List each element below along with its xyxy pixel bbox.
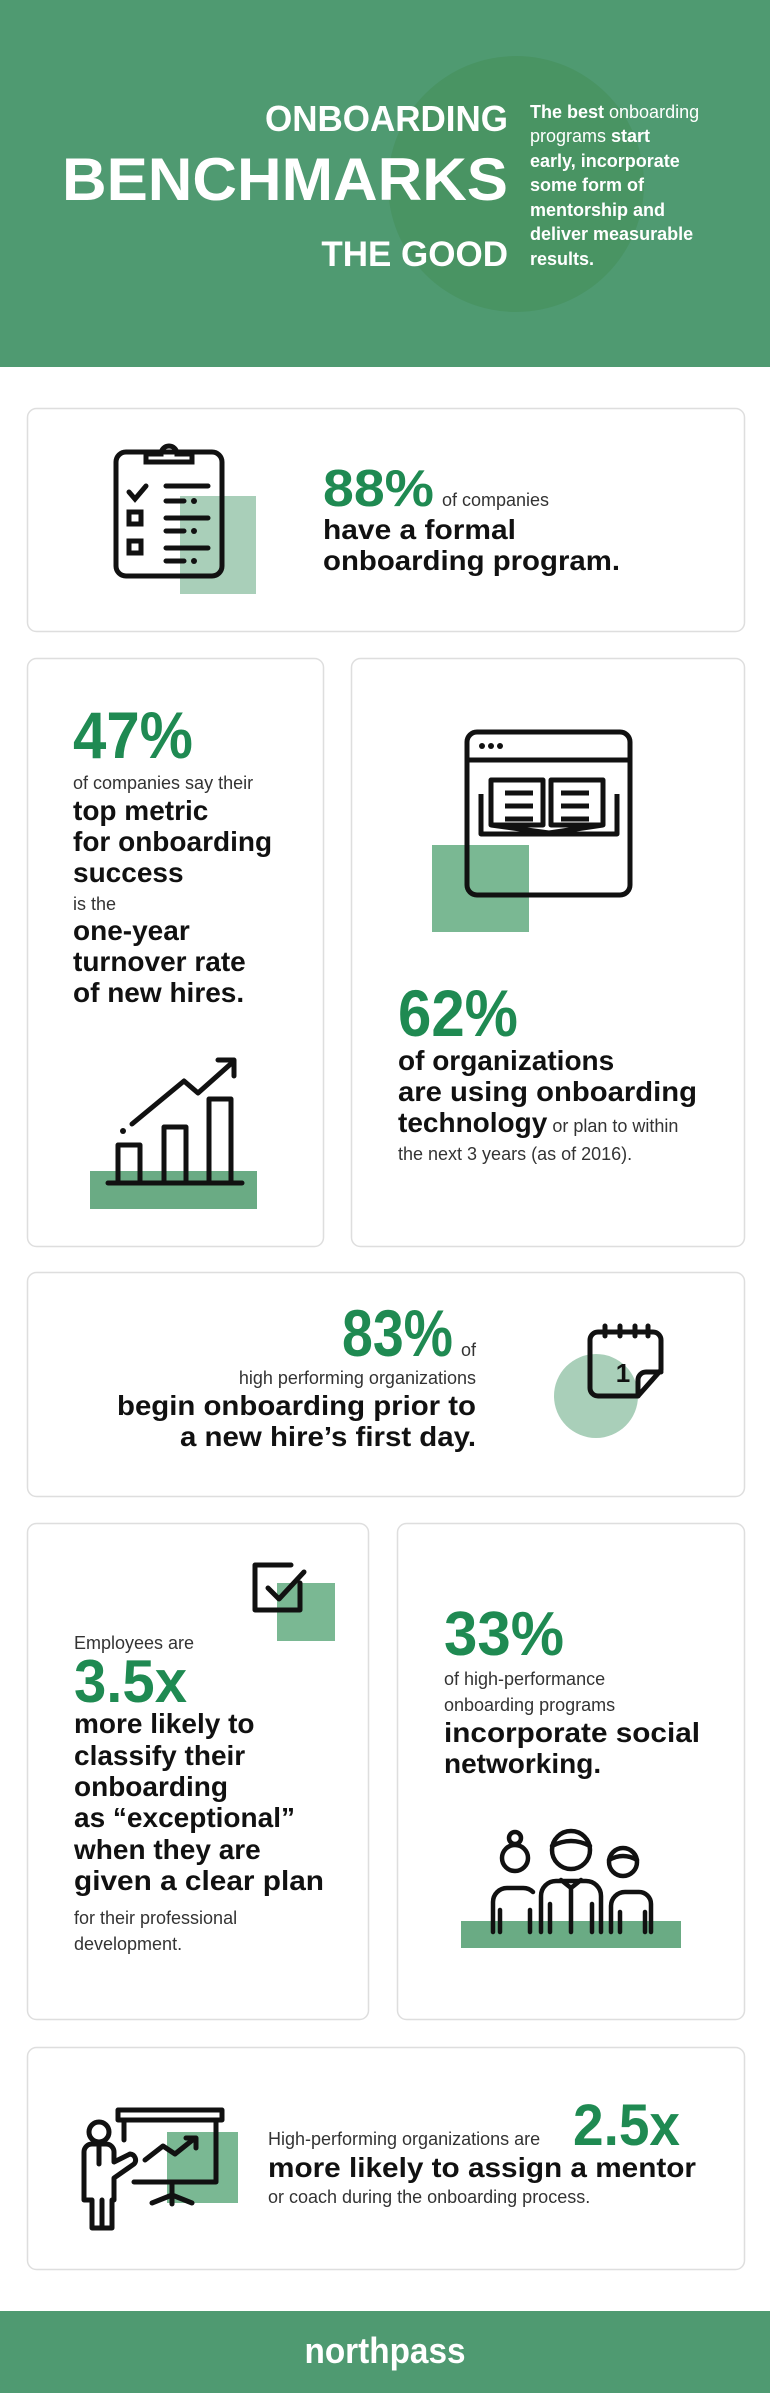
header description: programs start [530, 126, 650, 146]
stat text 3.5x: Employees are [74, 1633, 194, 1653]
stat text 88%: have a formal [323, 514, 516, 545]
stat text 3.5x: classify their [74, 1740, 245, 1771]
stat text 88%: of companies [442, 490, 549, 510]
card: 33% social networking [398, 1524, 744, 2020]
stat text 62%: technology or plan to within [398, 1107, 678, 1138]
stat text 47%: turnover rate [73, 946, 246, 977]
icon: bar chart [90, 1060, 257, 1209]
stat text 47%: of companies say their [73, 773, 253, 793]
stat text 47%: is the [73, 894, 116, 914]
stat text 62% [398, 976, 697, 1164]
stat text 62%: 62% [398, 976, 518, 1050]
stat text 3.5x: for their professional [74, 1908, 237, 1928]
footer with northpass logo [0, 2311, 770, 2393]
stat text 33%: networking. [444, 1748, 601, 1779]
card: 3.5x clear plan [28, 1524, 368, 2020]
stat text 47%: of new hires. [73, 977, 244, 1008]
stat text 2.5x [268, 2093, 696, 2207]
stat text 3.5x [73, 1633, 324, 1954]
stat text 33%: of high-performance [444, 1669, 605, 1689]
footer with northpass logo: northpass [304, 2330, 466, 2371]
title: THE GOOD [321, 235, 508, 274]
stat text 83%: 83% [342, 1296, 453, 1370]
stat text 2.5x: or coach during the onboarding process. [268, 2187, 590, 2207]
stat text 83%: high performing organizations [239, 1368, 476, 1388]
header description: The best onboarding [530, 102, 699, 122]
stat text 3.5x: more likely to [74, 1708, 255, 1739]
card: 83% prior to first day [28, 1272, 744, 1496]
stat text 2.5x: High-performing organizations are [268, 2129, 540, 2149]
stat text 33%: incorporate social [444, 1717, 700, 1748]
header description: deliver measurable [530, 224, 693, 244]
card: 88% formal program [28, 408, 744, 632]
stat text 47%: top metric [73, 795, 208, 826]
icon: browser with book [432, 732, 630, 932]
stat text 3.5x: when they are [73, 1834, 261, 1865]
stat text 33%: onboarding programs [444, 1695, 615, 1715]
stat text 47%: 47% [73, 698, 193, 772]
stat text 83% [117, 1296, 477, 1452]
header description: early, incorporate [530, 151, 680, 171]
stat text 47% [73, 698, 272, 1008]
stat text 88% [323, 460, 620, 576]
icon: clipboard [116, 446, 256, 594]
stat text 62%: of organizations [398, 1045, 614, 1076]
stat text 83%: a new hire’s first day. [180, 1421, 476, 1452]
title [62, 98, 508, 274]
stat text 83%: of [461, 1340, 477, 1360]
icon: presenter at board [84, 2110, 238, 2228]
stat text 47%: for onboarding [73, 826, 272, 857]
icon: calendar: 1 [616, 1358, 630, 1388]
header description: results. [530, 249, 594, 269]
icon: calendar [554, 1326, 661, 1438]
stat text 33% [444, 1600, 700, 1779]
title: ONBOARDING [265, 98, 508, 139]
stat text 88%: onboarding program. [323, 545, 620, 576]
stat text 47%: one-year [73, 915, 190, 946]
stat text 62%: the next 3 years (as of 2016). [398, 1144, 632, 1164]
stat text 3.5x: as “exceptional” [74, 1802, 295, 1833]
icon: checkbox [255, 1565, 335, 1641]
card: 62% technology [352, 658, 744, 1246]
header description [530, 102, 699, 269]
stat text 33%: 33% [444, 1600, 564, 1669]
stat text 47%: success [73, 857, 184, 888]
stat text 3.5x: 3.5x [74, 1648, 187, 1715]
stat text 2.5x: 2.5x [573, 2093, 680, 2158]
stat text 3.5x: onboarding [74, 1771, 228, 1802]
header description: mentorship and [530, 200, 665, 220]
card: 47% metric [28, 658, 324, 1246]
stat text 3.5x: given a clear plan [74, 1865, 324, 1896]
stat text 62%: are using onboarding [398, 1076, 697, 1107]
icon: people group [461, 1831, 681, 1948]
stat text 83%: begin onboarding prior to [117, 1390, 476, 1421]
stat text 2.5x: more likely to assign a mentor [268, 2152, 696, 2183]
card: 2.5x mentor [28, 2048, 744, 2270]
stat text 3.5x: development. [74, 1934, 182, 1954]
header description: some form of [530, 175, 645, 195]
header banner [0, 0, 770, 367]
title: BENCHMARKS [62, 146, 508, 213]
stat text 88%: 88% [323, 460, 434, 518]
